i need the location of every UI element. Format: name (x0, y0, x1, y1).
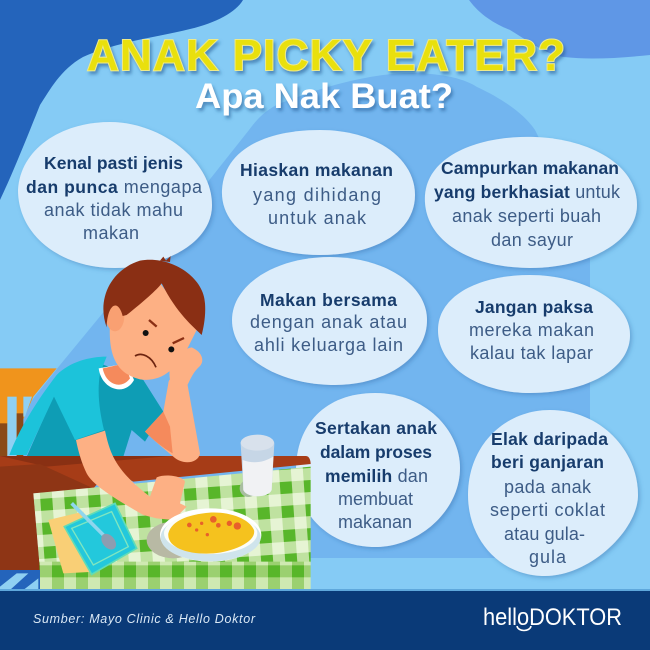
bubble: hiaskan makanan: untuk anak (268, 208, 367, 228)
boy fist (169, 347, 202, 387)
bubble: campurkan makanan: Campurkan makanan (441, 158, 619, 178)
napkin (48, 503, 137, 574)
spoon (72, 503, 119, 552)
boy near arm and hand (76, 431, 187, 520)
bubble: elak daripada: pada anak (504, 477, 592, 497)
bubble: makan bersama: ahli keluarga lain (254, 335, 403, 355)
bubble: elak daripada: Elak daripada (491, 429, 608, 449)
bubble: campurkan makanan: anak seperti buah (452, 206, 601, 226)
bubble: sertakan anak: membuat (338, 489, 413, 509)
boy torso and shirt (9, 357, 163, 457)
title (87, 31, 565, 116)
bubble: kenal pasti: makan (83, 223, 139, 243)
bubble: elak daripada: atau gula- (504, 524, 585, 544)
bubble: elak daripada (468, 410, 638, 576)
bubble: sertakan anak: memilih dan (325, 466, 428, 486)
bubble: campurkan makanan: dan sayur (491, 230, 573, 250)
glass of milk (240, 435, 274, 497)
floor (0, 570, 40, 590)
plate of rice (147, 508, 261, 562)
bubble: hiaskan makanan (222, 130, 415, 255)
bubble: sertakan anak: makanan (338, 512, 412, 532)
bubble: makan bersama: dengan anak atau (250, 312, 407, 332)
bubble: elak daripada: beri ganjaran (491, 452, 604, 472)
bubble: elak daripada: seperti coklat (490, 500, 605, 520)
bubble: kenal pasti (18, 122, 212, 268)
bubble: elak daripada: gula (529, 547, 567, 567)
bubble: campurkan makanan: yang berkhasiat untuk (434, 182, 621, 202)
bubble: makan bersama: Makan bersama (260, 290, 397, 310)
subheading: Apa Nak Buat: Apa Nak Buat? (195, 77, 453, 116)
boy head (103, 256, 205, 380)
chair (0, 368, 57, 457)
illustration: boy at table (0, 256, 311, 590)
boy neck (99, 363, 134, 389)
bubble: jangan paksa (438, 275, 630, 393)
bubble: jangan paksa: mereka makan (469, 320, 594, 340)
bubble: kenal pasti: Kenal pasti jenis (44, 153, 183, 173)
bubble: kenal pasti: anak tidak mahu (44, 200, 183, 220)
tablecloth (33, 467, 311, 590)
logo: hello doktor: helloDOKTOR (483, 604, 622, 631)
heading: Anak Picky Eater: ANAK PICKY EATER? (87, 31, 565, 80)
bubble: hiaskan makanan: Hiaskan makanan (240, 160, 393, 180)
bubble: jangan paksa: Jangan paksa (475, 297, 593, 317)
source text: Sumber: Mayo Clinic & Hello Doktor (33, 612, 256, 626)
footer band (0, 589, 650, 650)
boy far arm (145, 376, 200, 462)
bubble: campurkan makanan (425, 137, 637, 268)
bubble: sertakan anak (296, 393, 460, 547)
bubble: sertakan anak: Sertakan anak (315, 418, 437, 438)
bubble: jangan paksa: kalau tak lapar (470, 343, 593, 363)
bubble: sertakan anak: dalam proses (320, 442, 432, 462)
bubble: kenal pasti: dan punca mengapa (26, 177, 203, 197)
table (0, 456, 311, 570)
bubble: makan bersama (232, 257, 427, 385)
bubble: hiaskan makanan: yang dihidang (253, 185, 381, 205)
